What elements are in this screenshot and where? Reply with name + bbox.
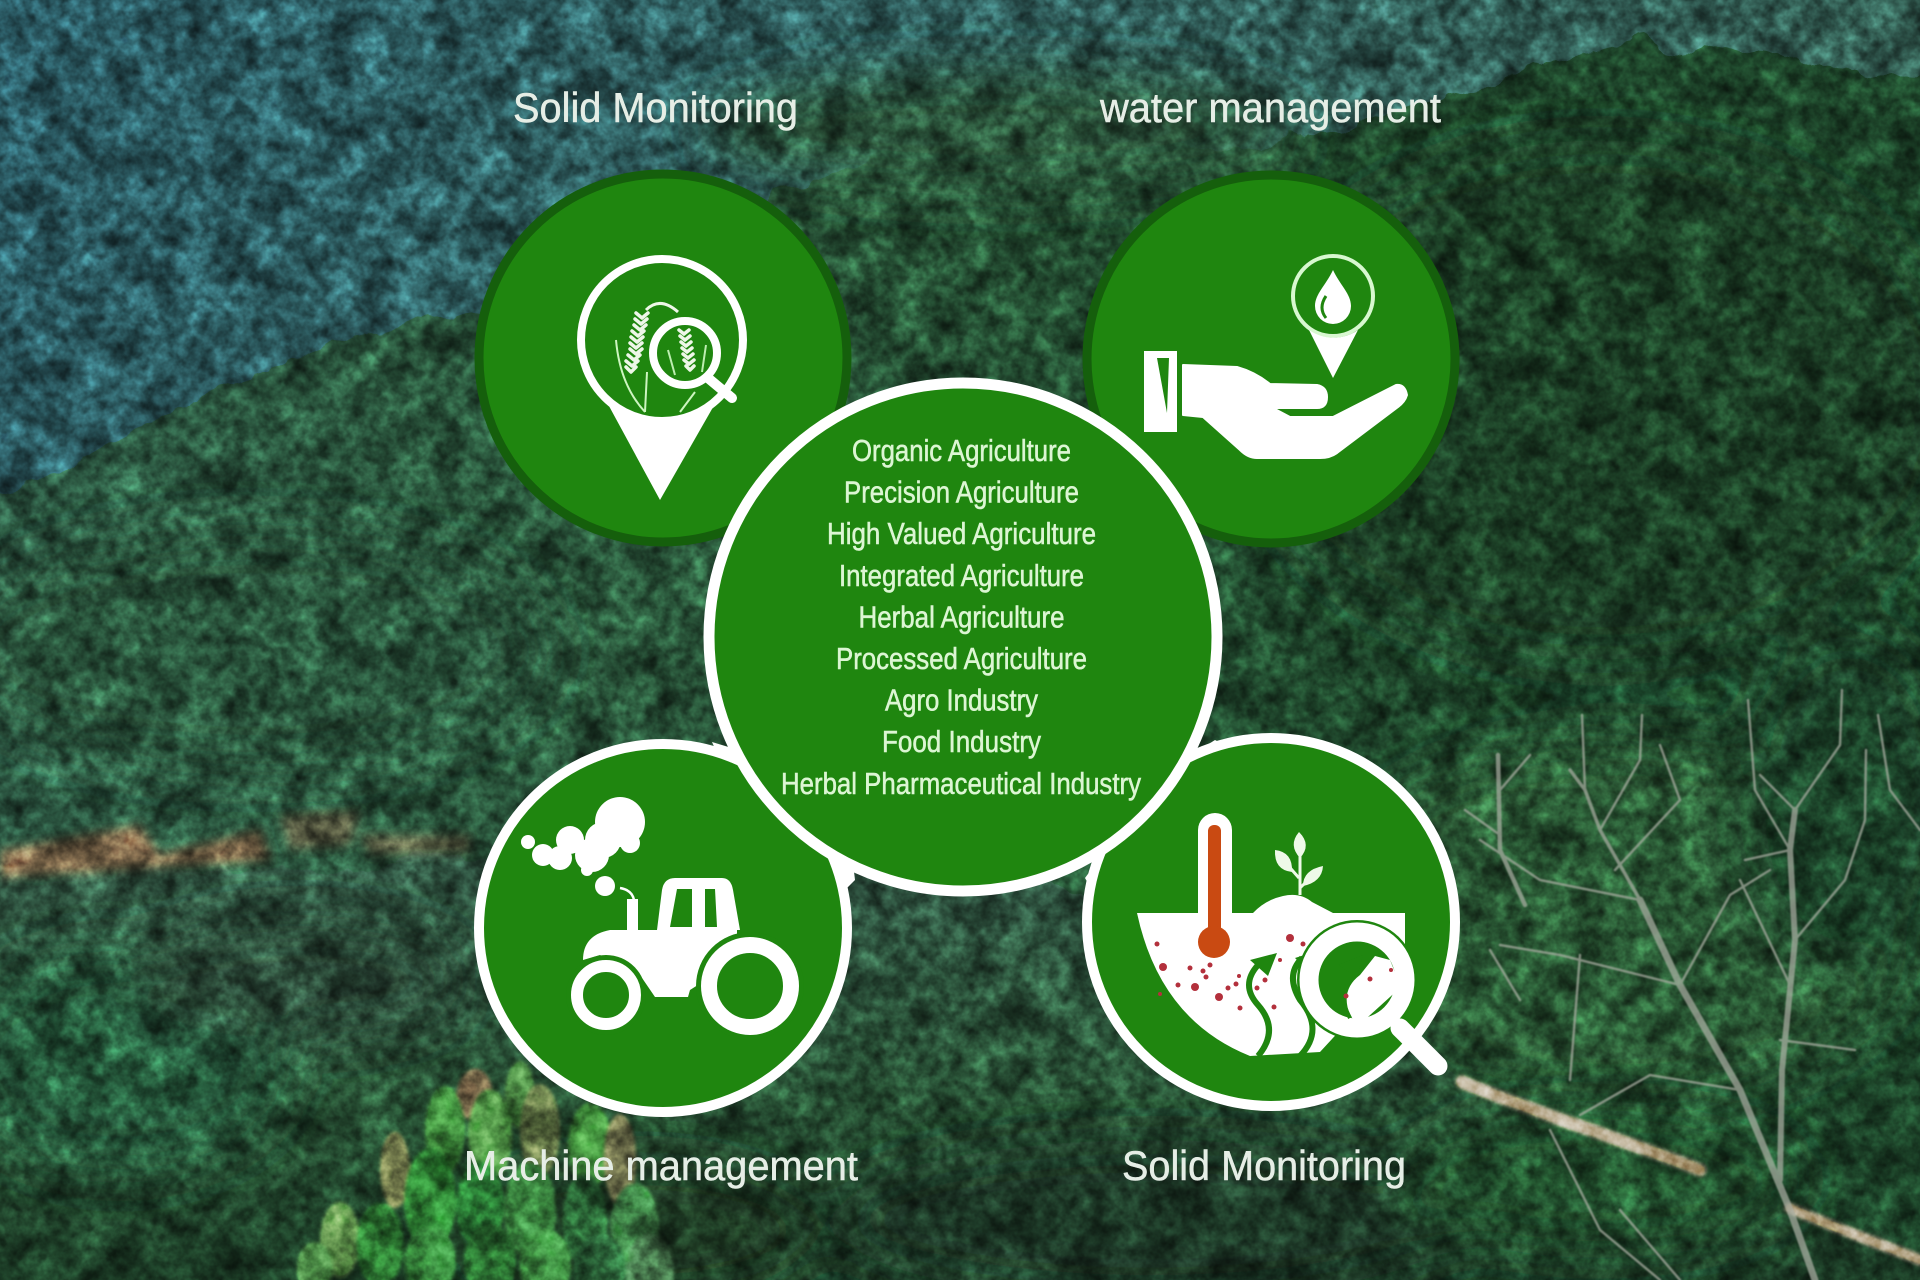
text block: agriculture list: Integrated Agriculture: [839, 558, 1084, 593]
label: bottom right: Solid Monitoring: [1122, 1142, 1406, 1189]
panel: soil/wheat monitoring circle: [479, 174, 847, 542]
text block: agriculture list: Agro Industry: [885, 683, 1038, 718]
panel: central list circle: [709, 383, 1217, 891]
background: bare trees: [1465, 690, 1920, 1280]
background: exposed earth band: [0, 810, 470, 878]
text block: agriculture list: High Valued Agriculture: [827, 516, 1096, 551]
text block: agriculture list: Herbal Pharmaceutical Industry: [781, 766, 1141, 801]
text block: agriculture list: Herbal Agriculture: [858, 599, 1064, 634]
label: bottom left: Machine management: [464, 1142, 858, 1189]
background: foreground leaves: [297, 1061, 674, 1280]
decoration: white joints: [712, 742, 855, 890]
icon: soil, thermometer and magnifier: [1137, 813, 1438, 1066]
panel: water management circle: [1087, 175, 1455, 543]
panel: soil monitoring circle: [1085, 738, 1455, 1106]
label: top left: Solid Monitoring: [513, 84, 798, 131]
background: dirt road: [1462, 1082, 1920, 1260]
icon: tractor with smoke: [521, 797, 804, 1040]
text block: agriculture list: Processed Agriculture: [836, 641, 1087, 676]
text block: agriculture list: Precision Agriculture: [844, 475, 1079, 510]
text block: agriculture list: Organic Agriculture: [852, 433, 1071, 468]
decoration: white joints: [1085, 740, 1225, 892]
panel: machine management circle: [479, 742, 855, 1112]
text block: agriculture list: Food Industry: [882, 724, 1041, 759]
label: top right: water management: [1099, 84, 1441, 131]
text block: agriculture list: [781, 433, 1141, 801]
icon: hand with water pin: [1144, 256, 1407, 458]
icon: wheat location pin: [581, 259, 743, 500]
